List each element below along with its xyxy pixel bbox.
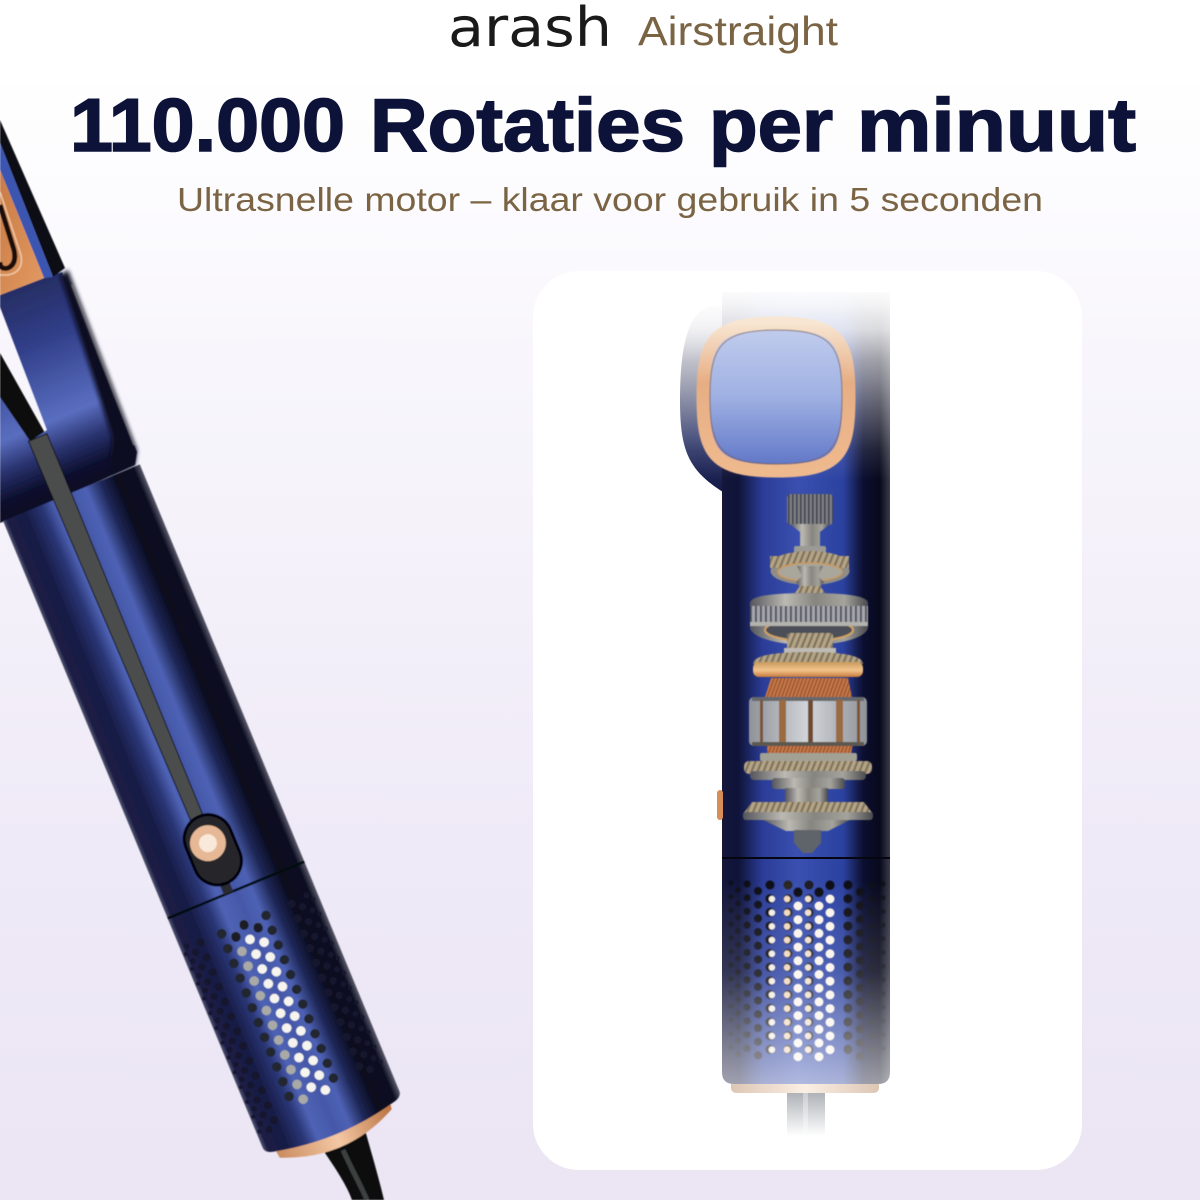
dryer barrel	[0, 405, 411, 1175]
shaft lower	[785, 788, 828, 803]
slider track	[28, 434, 215, 848]
head block	[0, 272, 137, 523]
title: minuut	[857, 83, 1136, 167]
collar	[784, 648, 836, 653]
top dark edge	[0, 120, 65, 277]
dark outer columns	[731, 883, 883, 1058]
shaft	[790, 524, 830, 548]
upper winding	[765, 678, 852, 697]
side copper button	[717, 790, 723, 820]
lower section	[722, 858, 890, 1084]
gear 5	[743, 802, 873, 820]
vent holes	[731, 883, 883, 1058]
upper barrel	[3, 464, 304, 917]
title: Rotaties	[370, 83, 685, 167]
slider track stub	[216, 873, 233, 895]
copper end ring	[272, 1095, 399, 1171]
seam	[168, 862, 304, 918]
left dryer product photo	[0, 120, 411, 1200]
shaft base	[794, 546, 826, 553]
vent holes: centre columns	[222, 915, 342, 1118]
copper gear	[753, 652, 863, 677]
pinion 2	[787, 633, 833, 650]
head outer shell	[680, 306, 870, 492]
lower winding	[766, 742, 853, 755]
cord	[787, 1090, 825, 1136]
vent holes: side columns	[183, 894, 390, 1136]
top fade	[670, 285, 895, 480]
title	[70, 83, 1136, 167]
gear 1	[770, 551, 850, 590]
title: per	[709, 83, 833, 167]
slider button	[177, 807, 249, 892]
stator	[749, 697, 867, 746]
bottom fade	[715, 880, 895, 1084]
title: 110.000	[70, 83, 345, 167]
head dark edge	[60, 270, 137, 475]
half-lit columns	[770, 885, 809, 1051]
body	[722, 292, 890, 857]
cone	[763, 820, 850, 831]
black wedge behind head	[0, 353, 45, 445]
power cord	[322, 1130, 384, 1200]
plate	[760, 753, 857, 761]
subtitle: Ultrasnelle motor – klaar voor gebruik in 5 seconden	[177, 181, 1043, 218]
seam	[722, 857, 890, 859]
right dryer cutaway	[670, 285, 895, 1136]
copper vent panel	[0, 170, 44, 295]
blue strip	[0, 143, 53, 278]
copper end	[731, 1080, 879, 1093]
product name: Airstraight	[638, 8, 839, 54]
lower barrel	[168, 862, 405, 1162]
white panel	[533, 271, 1082, 1170]
tip	[794, 830, 821, 853]
head edge highlight	[72, 285, 134, 445]
hub	[772, 778, 845, 789]
display panel	[703, 323, 849, 471]
bright columns	[798, 885, 830, 1058]
pinion	[795, 586, 825, 593]
knurled cap	[787, 494, 833, 525]
large ring bearing	[750, 593, 868, 645]
gear 4	[744, 761, 872, 780]
motor assembly	[743, 494, 873, 853]
